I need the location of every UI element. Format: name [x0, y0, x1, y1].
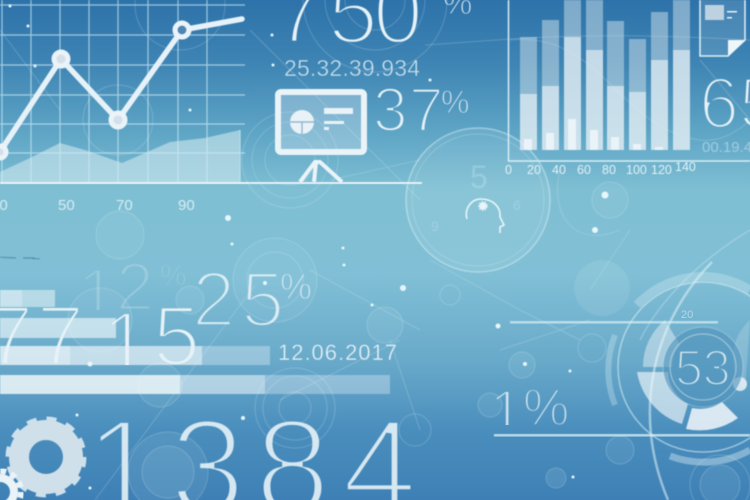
dashed line [0, 257, 40, 259]
x axis labels [0, 197, 195, 214]
icon: small gear [0, 471, 21, 500]
data line [0, 19, 242, 155]
sparkles [8, 4, 608, 490]
bar chart axis labels: 0 [505, 163, 512, 177]
stat 25%: 25 [192, 255, 284, 343]
faint stat 12%: 1 [78, 255, 116, 331]
faint stat 12% [86, 264, 185, 310]
faint stat 12%: 2 [116, 249, 154, 325]
brain dial [406, 128, 550, 272]
right dial [608, 230, 750, 500]
bar chart axis labels: 20 [527, 163, 541, 177]
faint stat 12%: % [160, 259, 187, 292]
date: 12.06.2017 [278, 340, 397, 365]
dial numbers [431, 159, 521, 234]
number 25.32.39.934: 25.32.39.934 [284, 55, 420, 81]
bar chart axis labels: 60 [577, 163, 591, 177]
bar chart axis labels [505, 160, 696, 177]
bar chart axis labels: 140 [675, 160, 696, 174]
stat 15: 5 [153, 289, 200, 384]
icon: gear [9, 420, 83, 494]
dial rings [406, 128, 550, 272]
icon: document [700, 0, 745, 56]
bar chart axis labels: 120 [651, 163, 672, 177]
x axis labels: 70 [116, 197, 133, 214]
chart area fill [0, 130, 240, 183]
chart frame [508, 0, 750, 161]
baseline rule [250, 182, 422, 184]
dial numbers: 6 [513, 197, 521, 213]
icon: presentation board [278, 92, 364, 182]
data points [0, 23, 189, 158]
dial value 53: 53 [675, 340, 731, 396]
bar chart axis labels: 40 [552, 163, 566, 177]
stat 1% [496, 390, 567, 425]
dial numbers: 5 [470, 159, 488, 195]
stat 1%: % [523, 379, 569, 437]
stat 37%: % [441, 84, 469, 120]
dial centre [663, 327, 743, 407]
stat 1%: 1 [490, 379, 522, 444]
horizontal stacked bars [0, 290, 390, 394]
stat 37%: 37 [373, 76, 443, 145]
x axis labels: 90 [178, 197, 195, 214]
top left line chart [0, 0, 250, 184]
x axis labels: 50 [58, 197, 75, 214]
bar chart axis labels: 100 [626, 163, 647, 177]
white bars [524, 119, 663, 150]
chart axis [0, 182, 250, 184]
dark bars [520, 0, 690, 150]
stat 15: 1 [102, 295, 149, 390]
outer arcs [608, 230, 750, 500]
bar chart [508, 0, 750, 161]
stat 25%: % [280, 266, 312, 307]
dial small label 20: 20 [681, 309, 693, 321]
chart grid [0, 0, 245, 183]
rule upper [510, 321, 718, 324]
icon: head with gear [466, 199, 504, 233]
dial segments [637, 320, 750, 430]
dial numbers: 9 [431, 218, 439, 234]
bar chart axis labels: 80 [602, 163, 616, 177]
rule lower [494, 434, 750, 436]
light bars [520, 37, 690, 150]
stat 15 [112, 308, 196, 365]
